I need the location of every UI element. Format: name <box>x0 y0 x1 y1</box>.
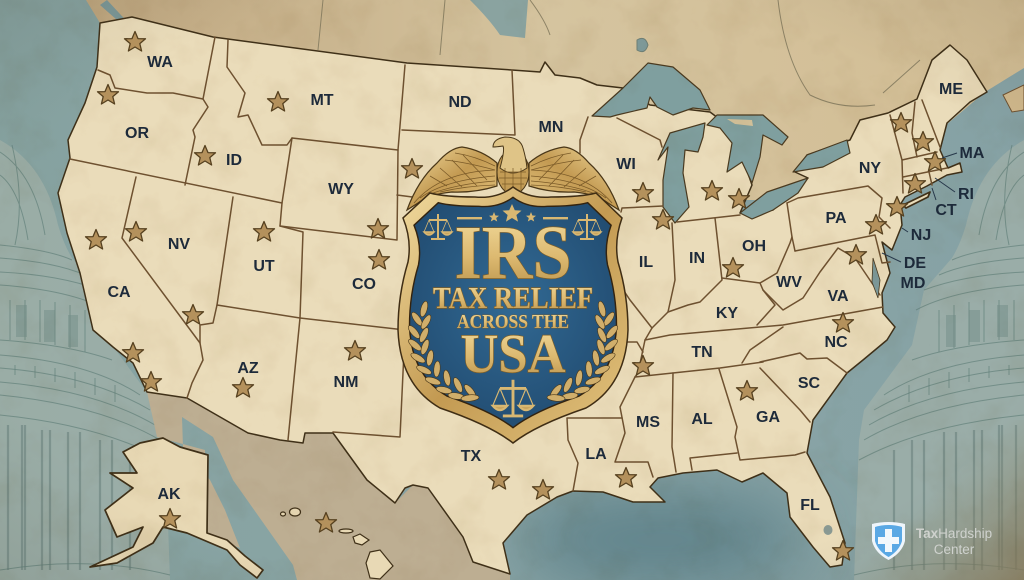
badge: eagle body and head <box>493 137 529 194</box>
badge: blue shield field <box>410 197 616 428</box>
icon: scales bottom <box>493 380 533 416</box>
illustration: capitol dome left <box>0 140 170 580</box>
labels: state abbreviations: WY <box>328 181 354 198</box>
labels: state abbreviations: RI <box>958 186 974 203</box>
badge title: tax relief: TAX RELIEF <box>433 280 593 315</box>
region: canada <box>86 0 1024 200</box>
labels: state abbreviations: GA <box>756 409 780 426</box>
labels: state abbreviations: CO <box>352 276 376 293</box>
labels: state abbreviations: TX <box>461 448 482 465</box>
stars: state markers <box>86 32 946 560</box>
labels: state abbreviations: AK <box>157 486 181 503</box>
labels: state abbreviations: NJ <box>911 227 931 244</box>
map: lake okeechobee <box>824 525 832 535</box>
map: long island <box>903 192 930 208</box>
icon: scales left <box>424 214 452 239</box>
region: gulf of mexico shading <box>510 490 810 580</box>
icon: scales right <box>573 214 601 239</box>
text: logo wordmark: TaxHardship <box>916 526 992 541</box>
illustration: capitol dome right <box>854 140 1024 580</box>
labels: state abbreviations: AZ <box>237 360 259 377</box>
labels: state abbreviations: PA <box>825 210 847 227</box>
map: hawaii islands <box>280 508 393 579</box>
labels: state abbreviations: KY <box>716 305 738 322</box>
labels: state abbreviations <box>107 54 985 514</box>
labels: state abbreviations: WV <box>776 274 802 291</box>
text: logo center: Center <box>934 542 975 557</box>
labels: state abbreviations: DE <box>904 255 926 272</box>
labels: state abbreviations: FL <box>800 497 820 514</box>
map: manitoulin island <box>727 119 753 126</box>
labels: state abbreviations: TN <box>691 344 713 361</box>
region: nova scotia <box>1003 85 1024 112</box>
labels: state abbreviations: MD <box>901 275 925 292</box>
labels: state abbreviations: VA <box>827 288 849 305</box>
map: great lakes <box>592 63 850 223</box>
labels: state abbreviations: IL <box>639 254 653 271</box>
badge title: IRS: IRS <box>454 211 572 295</box>
labels: state abbreviations: ND <box>448 94 472 111</box>
labels: state abbreviations: NC <box>824 334 848 351</box>
labels: state abbreviations: NY <box>859 160 881 177</box>
labels: state abbreviations: MA <box>960 145 985 162</box>
labels: state abbreviations: CA <box>107 284 131 301</box>
badge: eagle right wing <box>529 147 619 210</box>
badge: top stars and rules <box>457 204 568 222</box>
labels: state abbreviations: ME <box>939 81 963 98</box>
labels: state abbreviations: NM <box>334 374 358 391</box>
labels: state abbreviations: OH <box>742 238 766 255</box>
labels: state abbreviations: MN <box>539 119 563 136</box>
icon: logo shield <box>872 522 905 560</box>
leader lines: northeast states <box>882 153 957 262</box>
labels: state abbreviations: WI <box>616 156 636 173</box>
logo: TaxHardship Center <box>872 522 992 560</box>
icon: laurel left <box>406 300 479 402</box>
labels: state abbreviations: OR <box>125 125 149 142</box>
badge title: across the: ACROSS THE <box>457 311 569 333</box>
labels: state abbreviations: AL <box>691 411 713 428</box>
map: state borders <box>70 37 947 491</box>
labels: state abbreviations: WA <box>147 54 173 71</box>
labels: state abbreviations: ID <box>226 152 242 169</box>
labels: state abbreviations: IN <box>689 250 705 267</box>
labels: state abbreviations: CT <box>935 202 957 219</box>
labels: state abbreviations: SC <box>798 375 821 392</box>
badge title: USA: USA <box>460 323 566 384</box>
labels: state abbreviations: MS <box>636 414 660 431</box>
icon: laurel right <box>547 300 620 402</box>
badge: eagle left wing <box>407 147 497 210</box>
map: alaska <box>90 438 263 578</box>
labels: state abbreviations: UT <box>253 258 275 275</box>
badge: outer gold rim <box>398 187 628 443</box>
labels: state abbreviations: MT <box>310 92 334 109</box>
map: chesapeake bay <box>872 258 880 298</box>
region: mexico <box>147 392 510 580</box>
labels: state abbreviations: LA <box>585 446 607 463</box>
overlay: warm lower right corner <box>874 434 1024 580</box>
map: canada rivers and lakes <box>100 0 920 106</box>
badge: IRS shield with eagle <box>398 137 628 443</box>
labels: state abbreviations: NV <box>168 236 190 253</box>
